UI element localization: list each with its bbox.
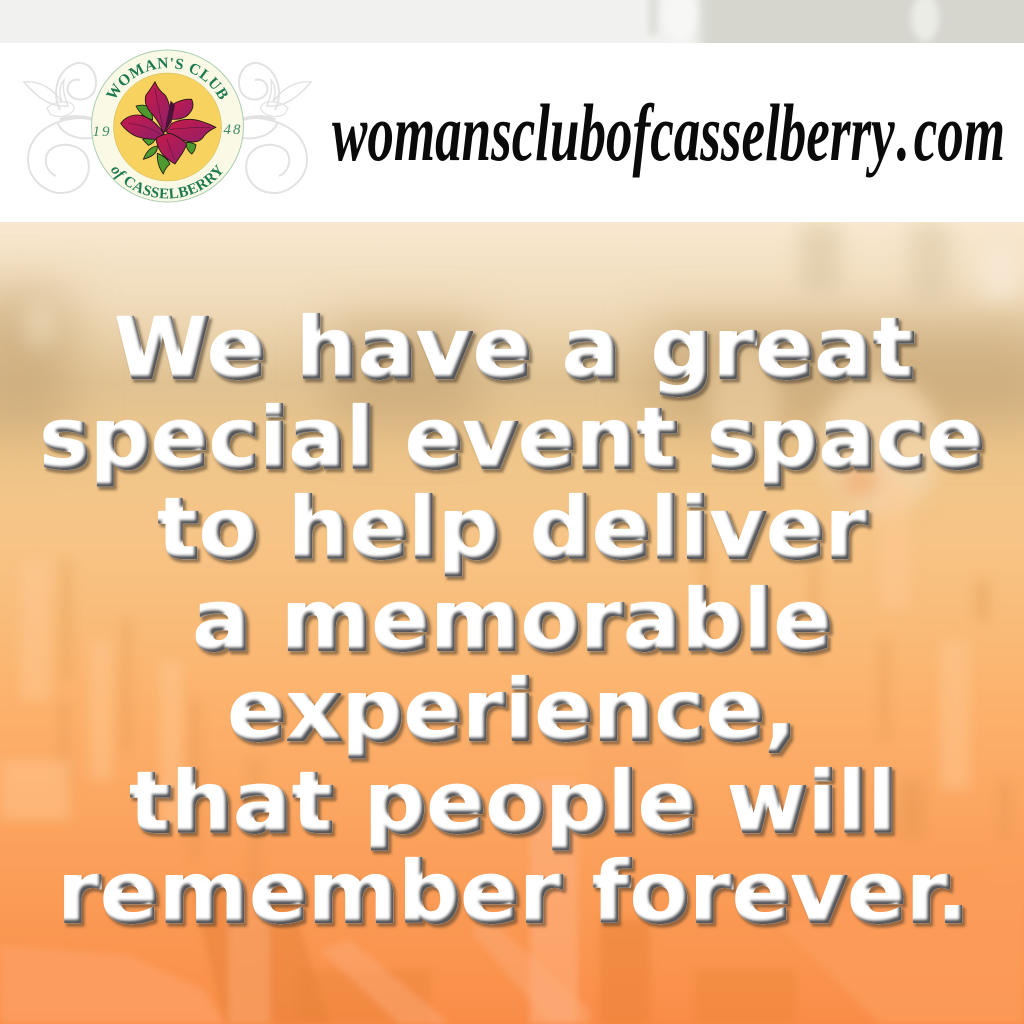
line 1: We have a great — [115, 300, 915, 398]
line 2: special event space — [40, 390, 985, 488]
badge top text: WOMAN'S CLUB — [106, 58, 228, 100]
icon: hibiscus flower — [121, 82, 216, 174]
logo flourish: right — [239, 63, 311, 193]
chair rows — [60, 540, 1010, 890]
white header band — [0, 43, 1024, 222]
line 5: experience, — [228, 662, 798, 760]
badge ring — [92, 50, 244, 202]
badge year left: 19 — [92, 124, 112, 140]
badge bottom text: of CASSELBERRY — [111, 164, 223, 199]
logo flourish: left — [24, 63, 96, 193]
badge year right: 48 — [224, 122, 242, 138]
logo badge — [91, 50, 244, 202]
line 7: remember forever. — [58, 844, 970, 942]
main message — [40, 300, 985, 942]
background photo panel with orange tint — [0, 222, 1024, 1024]
line 6: that people will — [130, 754, 898, 852]
badge yellow centre — [114, 73, 222, 181]
line 3: to help deliver — [158, 480, 869, 578]
top photo strip — [0, 0, 1024, 70]
line 4: a memorable — [193, 572, 833, 670]
